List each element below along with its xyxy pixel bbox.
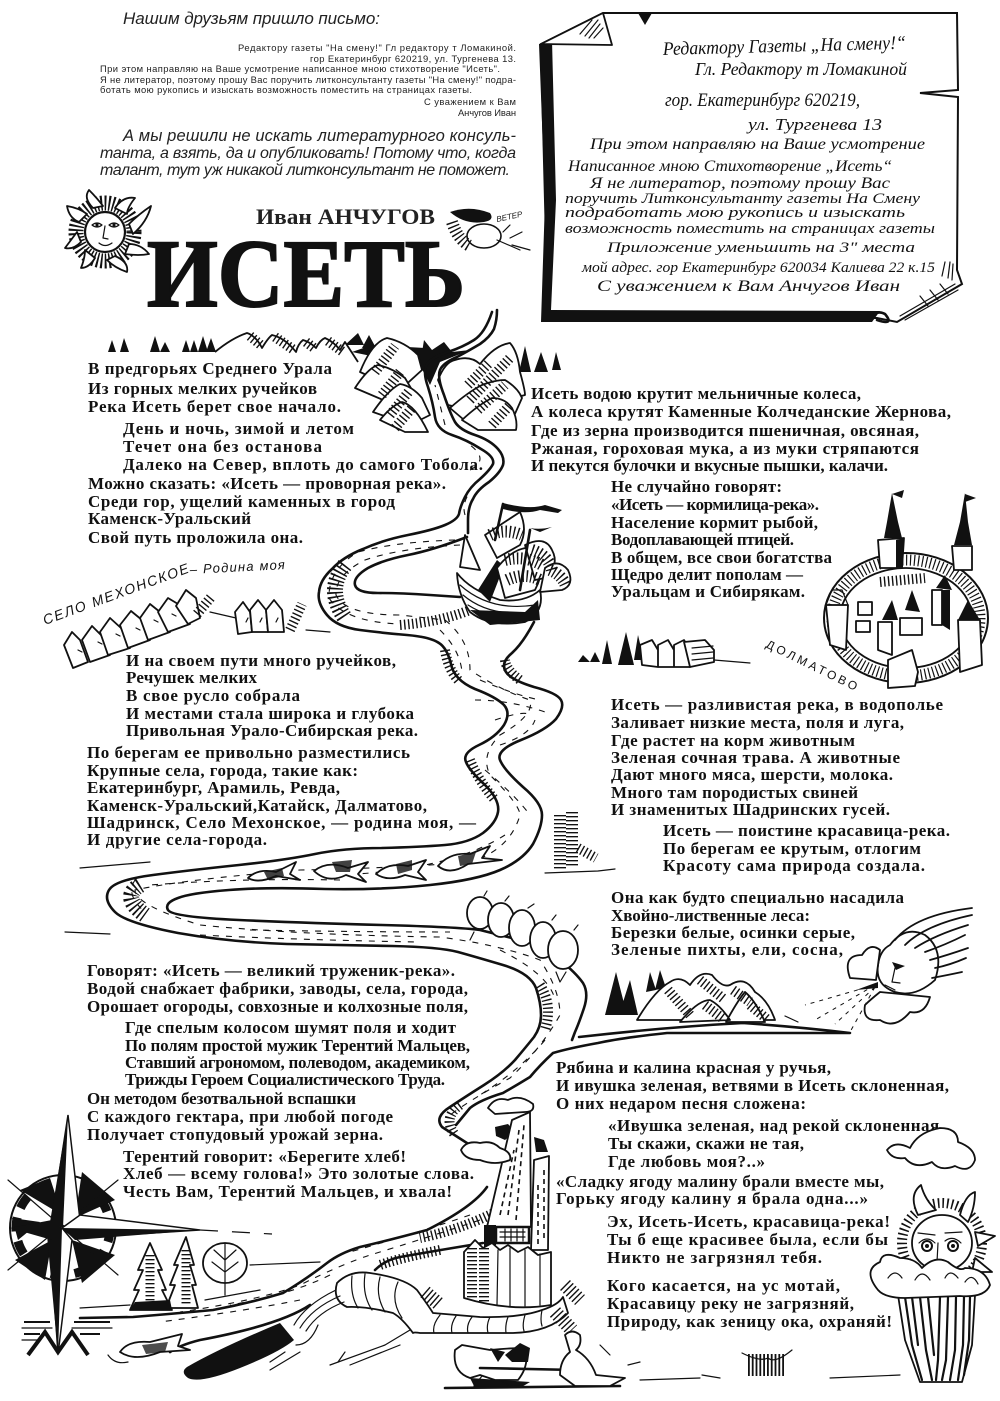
stanza: rowan and song: «Ивушка зеленая, над рекой склоненная, xyxy=(608,1116,944,1135)
stanza: the great toiler: Где спелым колосом шумят поля и ходит xyxy=(125,1018,457,1037)
illustration: lower trees and grass xyxy=(80,1237,320,1310)
icon: wind head xyxy=(450,209,530,250)
handwriting: мой адрес. гор Екатеринбург 620034 Калиева 22 к.15 xyxy=(581,260,936,276)
wind label: ВЕТЕР xyxy=(496,210,524,224)
stanza: floodplains: Заливает низкие места, поля и луга, xyxy=(611,713,904,732)
stanza: the great toiler: Терентий говорит: «Берегите хлеб! xyxy=(123,1147,406,1166)
scroll frame xyxy=(539,13,962,322)
stanza: streams and towns: И местами стала широка и глубока xyxy=(126,704,414,723)
stanza: rowan and song: Ты б еще красивее была, если бы xyxy=(607,1230,888,1249)
stanza: streams and towns xyxy=(87,651,477,849)
icon: sun behind cloud with rain xyxy=(870,1185,995,1382)
handwriting: Написанное мною Стихотворение „Исеть“ xyxy=(567,158,892,175)
illustration: Dalmatovo houses and trees xyxy=(578,632,750,667)
stanza: rowan and song: Красавицу реку не загрязняй, xyxy=(607,1294,854,1313)
stanza: the great toiler: С каждого гектара, при любой погоде xyxy=(87,1107,393,1126)
handwriting: ул. Тургенева 13 xyxy=(746,115,882,134)
stanza: streams and towns: Крупные села, города, такие как: xyxy=(87,761,358,780)
stanza: source of the river xyxy=(88,359,483,547)
stanza: the great toiler: Получает стопудовый урожай зерна. xyxy=(87,1125,383,1144)
stanza: source of the river: В предгорьях Среднего Урала xyxy=(88,359,332,378)
sun cloud xyxy=(870,1255,990,1298)
stanza: river the feeder: В общем, все свои богатства xyxy=(611,548,832,567)
stanza: rowan and song: И ивушка зеленая, ветвями в Исеть склоненная, xyxy=(556,1076,949,1095)
stanza: floodplains: Зеленая сочная трава. А животные xyxy=(611,748,900,767)
stanza: the great toiler xyxy=(87,961,474,1201)
stanza: streams and towns: Каменск-Уральский,Катайск, Далматово, xyxy=(87,796,427,815)
stanza: source of the river: Среди гор, ущелий каменных в город xyxy=(88,492,395,511)
sun face xyxy=(902,1185,995,1283)
river banks xyxy=(80,310,850,1352)
stanza: river the feeder: «Исеть — кормилица-река». xyxy=(611,495,819,514)
river ripples xyxy=(131,385,560,1322)
stanza: the great toiler: Ставший агрономом, полеводом, академиком, xyxy=(125,1053,470,1072)
panel: handwritten letter scroll xyxy=(539,13,962,322)
stanza: forests xyxy=(611,888,904,959)
stanza: mills: И пекутся булочки и вкусные пышки, калачи. xyxy=(531,456,888,475)
illustration: pigs on river bank xyxy=(467,891,578,982)
editorial comment xyxy=(100,127,516,179)
stanza: source of the river: Из горных мелких ручейков xyxy=(88,379,317,398)
stanza: streams and towns: Речушек мелких xyxy=(126,668,258,687)
handwriting: гор. Екатеринбург 620219, xyxy=(665,90,860,111)
stanza: river the feeder: Население кормит рыбой, xyxy=(611,513,818,532)
stanza: forests: Она как будто специально насадила xyxy=(611,888,904,907)
stanza: rowan and song: Где любовь моя?..» xyxy=(608,1152,765,1171)
stanza: rowan and song: Кого касается, на ус мотай, xyxy=(607,1276,840,1295)
stanza: source of the river: Можно сказать: «Исеть — проворная река». xyxy=(88,474,446,493)
stanza: rowan and song: Эх, Исеть-Исеть, красавица-река! xyxy=(607,1212,890,1231)
stanza: source of the river: Каменск-Уральский xyxy=(88,509,251,528)
illustration: middle mountains and trees xyxy=(605,970,798,1022)
fortress label: ДОЛМАТОВО xyxy=(764,637,860,694)
stanza: mills: А колеса крутят Каменные Колчеданские Жернова, xyxy=(531,402,951,421)
factory window xyxy=(496,1227,529,1243)
stanza: floodplains xyxy=(611,695,950,875)
compass north letter xyxy=(28,1332,88,1355)
typed letter text: С уважением к Вам xyxy=(424,96,516,107)
illustration: top mountains and trees xyxy=(108,333,561,432)
handwriting: подработать мою рукопись и изыскать xyxy=(565,205,905,221)
stanza: floodplains: И знаменитых Шадринских гусей. xyxy=(611,800,890,819)
stanza: streams and towns: По берегам ее привольно разместились xyxy=(87,743,410,762)
illustration: fish at river mouth xyxy=(108,1334,400,1365)
stanza: forests: Березки белые, осинки серые, xyxy=(611,923,855,942)
icon: compass rose xyxy=(8,1115,272,1355)
stanza: rowan and song: Горьку ягоду калину я брала одна...» xyxy=(556,1189,868,1208)
stanza: rowan and song: Ты скажи, скажи не тая, xyxy=(608,1134,804,1153)
icon: sun top left xyxy=(65,190,151,272)
stanza: river the feeder: Уральцам и Сибирякам. xyxy=(611,582,805,601)
stanza: streams and towns: Шадринск, Село Мехонское, — родина моя, — xyxy=(87,813,477,832)
handwriting: Я не литератор, поэтому прошу Вас xyxy=(589,175,890,192)
illustration: fish in river xyxy=(248,846,502,882)
stanza: rowan and song: Природу, как зеницу ока, охраняй! xyxy=(607,1312,892,1331)
stanza: rowan and song xyxy=(556,1058,949,1331)
illustration: Dalmatovo fortress xyxy=(824,490,988,688)
village label: СЕЛО МЕХОНСКОЕ xyxy=(41,560,192,628)
handwriting: При этом направляю на Ваше усмотрение xyxy=(589,136,925,153)
title: ИСЕТЬ xyxy=(147,220,465,327)
stanza: the great toiler: Орошает огороды, совхозные и колхозные поля, xyxy=(87,997,468,1016)
typed letter text: Редактору газеты "На смену!" Гл редактору т Ломакиной. xyxy=(238,42,516,53)
stanza: floodplains: Красоту сама природа создала. xyxy=(663,856,925,875)
stanza: the great toiler: Трижды Героем Социалистического Труда. xyxy=(125,1070,445,1089)
illustration: wheat sheaf and bank grass xyxy=(65,812,615,934)
stanza: the great toiler: Говорят: «Исеть — великий труженик-река». xyxy=(87,961,455,980)
stanza: rowan and song: «Сладку ягоду малину брали вместе мы, xyxy=(556,1172,884,1191)
stanza: streams and towns: Екатеринбург, Арамиль, Ревда, xyxy=(87,778,340,797)
stanza: floodplains: Дают много мяса, шерсти, молока. xyxy=(611,765,893,784)
stanza: floodplains: По берегам ее крутым, отлогим xyxy=(663,839,921,858)
stanza: streams and towns: Привольная Урало-Сибирская река. xyxy=(126,721,418,740)
stanza: the great toiler: Водой снабжает фабрики, заводы, села, города, xyxy=(87,979,468,998)
illustration: factory chimneys and smoke xyxy=(461,1098,551,1307)
stanza: mills: Ржаная, гороховая мука, а из муки стряпаются xyxy=(531,439,919,458)
typed letter text: При этом направляю на Ваше усмотрение написанное мною стихотворение "Исеть". xyxy=(100,63,500,74)
typed letter text: ботать мою рукопись и изыскать возможность поместить на страницах газеты. xyxy=(100,84,472,95)
handwriting xyxy=(565,33,936,295)
stanza: streams and towns: И другие села-города. xyxy=(87,830,267,849)
stanza: mills xyxy=(531,384,951,475)
illustration: small rain pillar xyxy=(640,1350,900,1380)
stanza: mills: Где из зерна производится пшеничная, овсяная, xyxy=(531,421,919,440)
illustration: drain pipe and pollution xyxy=(184,1272,580,1380)
illustration: ploughman with horse xyxy=(445,1332,640,1388)
handwriting: возможность поместить на страницах газеты xyxy=(565,221,935,237)
typed letter text: гор Екатеринбург 620219, ул. Тургенева 13. xyxy=(310,53,516,64)
stanza: source of the river: Свой путь проложила она. xyxy=(88,528,303,547)
typed letter text: Анчугов Иван xyxy=(458,107,516,118)
stanza: forests: Хвойно-лиственные леса: xyxy=(611,906,810,925)
handwriting: Гл. Редактору т Ломакиной xyxy=(694,59,907,79)
stanza: source of the river: Течет она без останова xyxy=(123,437,322,456)
illustration: small cloud xyxy=(887,1128,975,1169)
stanza: streams and towns: И на своем пути много ручейков, xyxy=(126,651,396,670)
stanza: rowan and song: О них недаром песня сложена: xyxy=(556,1094,806,1113)
editorial comment: танта, а взять, да и опубликовать! Потому что, когда xyxy=(100,145,516,162)
stanza: river the feeder: Водоплавающей птицей. xyxy=(611,530,794,549)
stanza: floodplains: Исеть — поистине красавица-река. xyxy=(663,821,950,840)
stanza: river the feeder: Не случайно говорят: xyxy=(611,477,782,496)
stanza: source of the river: Река Исеть берет свое начало. xyxy=(88,397,341,416)
factory fence xyxy=(464,1240,551,1307)
poem: right column xyxy=(531,384,951,1331)
stanza: source of the river: Далеко на Север, вплоть до самого Тобола. xyxy=(123,455,483,474)
stanza: streams and towns: В свое русло собрала xyxy=(126,686,300,705)
stanza: mills: Исеть водою крутит мельничные колеса, xyxy=(531,384,861,403)
stanza: river the feeder: Щедро делит пополам — xyxy=(611,565,804,584)
village label xyxy=(41,557,286,628)
stanza: floodplains: Исеть — разливистая река, в водополье xyxy=(611,695,943,714)
editorial comment: талант, тут уж никакой литконсультант не поможет. xyxy=(100,162,510,179)
typed letter text: Я не литератор, поэтому прошу Вас поручить литконсультанту газеты "На смену!" подра- xyxy=(100,74,516,85)
editorial comment: А мы решили не искать литературного консуль- xyxy=(122,127,516,145)
stanza: rowan and song: Рябина и калина красная у ручья, xyxy=(556,1058,831,1077)
stanza: river the feeder xyxy=(611,477,832,601)
stanza: source of the river: День и ночь, зимой и летом xyxy=(123,419,354,438)
icon: sailing ship xyxy=(457,503,570,625)
stanza: the great toiler: Честь Вам, Терентий Мальцев, и хвала! xyxy=(123,1182,452,1201)
river xyxy=(80,310,850,1352)
illustration: wind face blowing xyxy=(805,908,972,1032)
handwriting: С уважением к Вам Анчугов Иван xyxy=(597,278,900,295)
fortress buildings xyxy=(856,575,952,655)
handwriting: Приложение уменьшить на 3" места xyxy=(606,240,915,256)
poem: left column xyxy=(87,359,483,1201)
stanza: the great toiler: По полям простой мужик Терентий Мальцев, xyxy=(125,1036,470,1055)
stanza: the great toiler: Он методом безотвальной вспашки xyxy=(87,1089,356,1108)
author name: Иван АНЧУГОВ xyxy=(256,204,435,229)
stanza: floodplains: Где растет на корм животным xyxy=(611,731,855,750)
rain pillars xyxy=(898,1295,975,1382)
stanza: floodplains: Много там породистых свиней xyxy=(611,783,858,802)
stanza: the great toiler: Хлеб — всему голова!» Это золотые слова. xyxy=(123,1164,474,1183)
stanza: forests: Зеленые пихты, ели, сосна, xyxy=(611,940,843,959)
village label: – Родина моя xyxy=(188,557,286,577)
handwriting: Редактору Газеты „На смену!“ xyxy=(662,33,906,60)
handwriting: поручить Литконсультанту газеты На Смену xyxy=(565,191,920,207)
stanza: rowan and song: Никто не загрязнял тебя. xyxy=(607,1248,822,1267)
intro heading: Нашим друзьям пришло письмо: xyxy=(123,9,380,28)
typed letter text xyxy=(100,42,516,118)
fortress towers xyxy=(826,490,982,688)
illustration: village Mekhonskoe houses xyxy=(64,590,330,668)
